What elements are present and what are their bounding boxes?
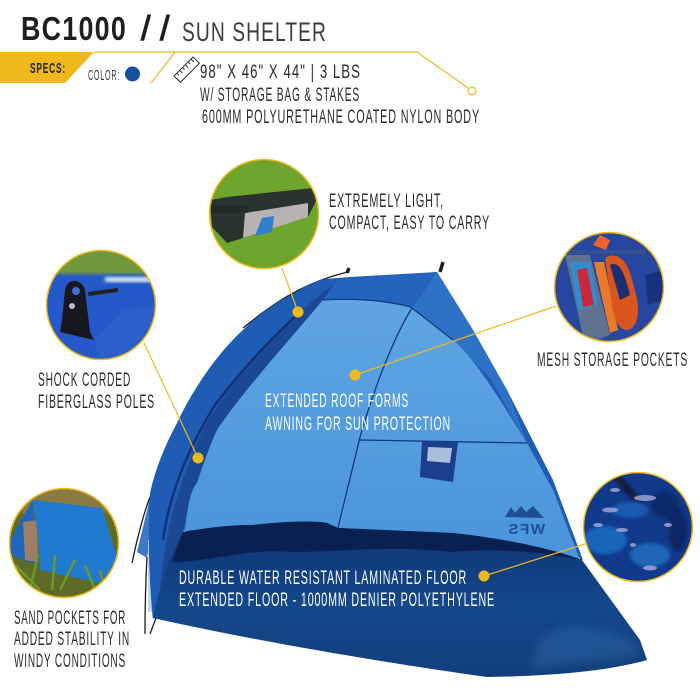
specs banner: SPECS: — [30, 60, 66, 77]
label: sand pockets: SAND POCKETS FOR — [14, 608, 126, 629]
label: fiberglass poles: FIBERGLASS POLES — [38, 392, 155, 413]
callout photo: carry bag — [208, 158, 320, 270]
label: extended roof: EXTENDED ROOF FORMS — [265, 391, 409, 412]
tent: dark stripe — [163, 312, 300, 540]
tent: logo: WFS — [507, 521, 545, 538]
callout photo: floor texture — [580, 470, 695, 585]
color swatch: COLOR: — [88, 68, 120, 84]
label: fiberglass poles: SHOCK CORDED — [38, 370, 131, 391]
label: light and compact: COMPACT, EASY TO CARRY — [329, 213, 490, 234]
callout photo: sand pocket — [8, 488, 120, 600]
tent: left light panel — [183, 299, 412, 545]
callout photo: mesh pockets — [554, 232, 664, 342]
tent: roof panel — [323, 272, 437, 307]
callout photo: pole hinge — [45, 248, 160, 365]
leader: carry bag — [282, 268, 304, 318]
tent: dark pole sleeve — [160, 282, 337, 590]
label: floor: DURABLE WATER RESISTANT LAMINATED FLOOR — [179, 568, 467, 589]
leader: floor — [478, 544, 585, 582]
tent: floor — [153, 522, 647, 677]
tent: side flap — [137, 490, 158, 558]
tent: right light panel — [338, 308, 580, 560]
title — [21, 10, 327, 48]
specs text: W/ STORAGE BAG & STAKES — [200, 85, 360, 106]
label: sand pockets: ADDED STABILITY IN — [14, 629, 130, 650]
label: light and compact: EXTREMELY LIGHT, — [329, 191, 444, 212]
tent: mesh pocket — [420, 441, 458, 482]
title: BC1000 — [21, 10, 127, 47]
tent: back roof panel — [412, 272, 527, 443]
title: SUN SHELTER — [182, 17, 327, 47]
tent: lower window — [148, 540, 158, 612]
leader: fiberglass poles — [144, 343, 204, 464]
label: extended roof: AWNING FOR SUN PROTECTION — [265, 414, 451, 435]
label: sand pockets — [14, 608, 130, 672]
icon: ruler — [174, 57, 199, 82]
specs text — [200, 62, 480, 128]
tent: seams — [323, 299, 527, 528]
tent: floor highlight — [530, 627, 640, 668]
label: fiberglass poles — [38, 370, 155, 413]
specs leader line — [94, 52, 476, 95]
tent: poles — [132, 262, 582, 634]
label: floor — [179, 568, 495, 611]
tent illustration — [132, 262, 647, 677]
tent: floor shadow band — [172, 522, 582, 562]
title: // — [141, 10, 171, 48]
specs banner — [0, 52, 94, 83]
label: light and compact — [329, 191, 490, 234]
tent: outer shell — [149, 272, 583, 620]
label: extended roof — [265, 391, 451, 435]
leader: mesh pockets — [350, 306, 556, 380]
tent: logo — [505, 506, 545, 538]
specs text: 600MM POLYURETHANE COATED NYLON BODY — [202, 107, 480, 128]
specs text: 98" X 46" X 44" | 3 LBS — [200, 62, 361, 83]
label: sand pockets: WINDY CONDITIONS — [14, 651, 126, 672]
